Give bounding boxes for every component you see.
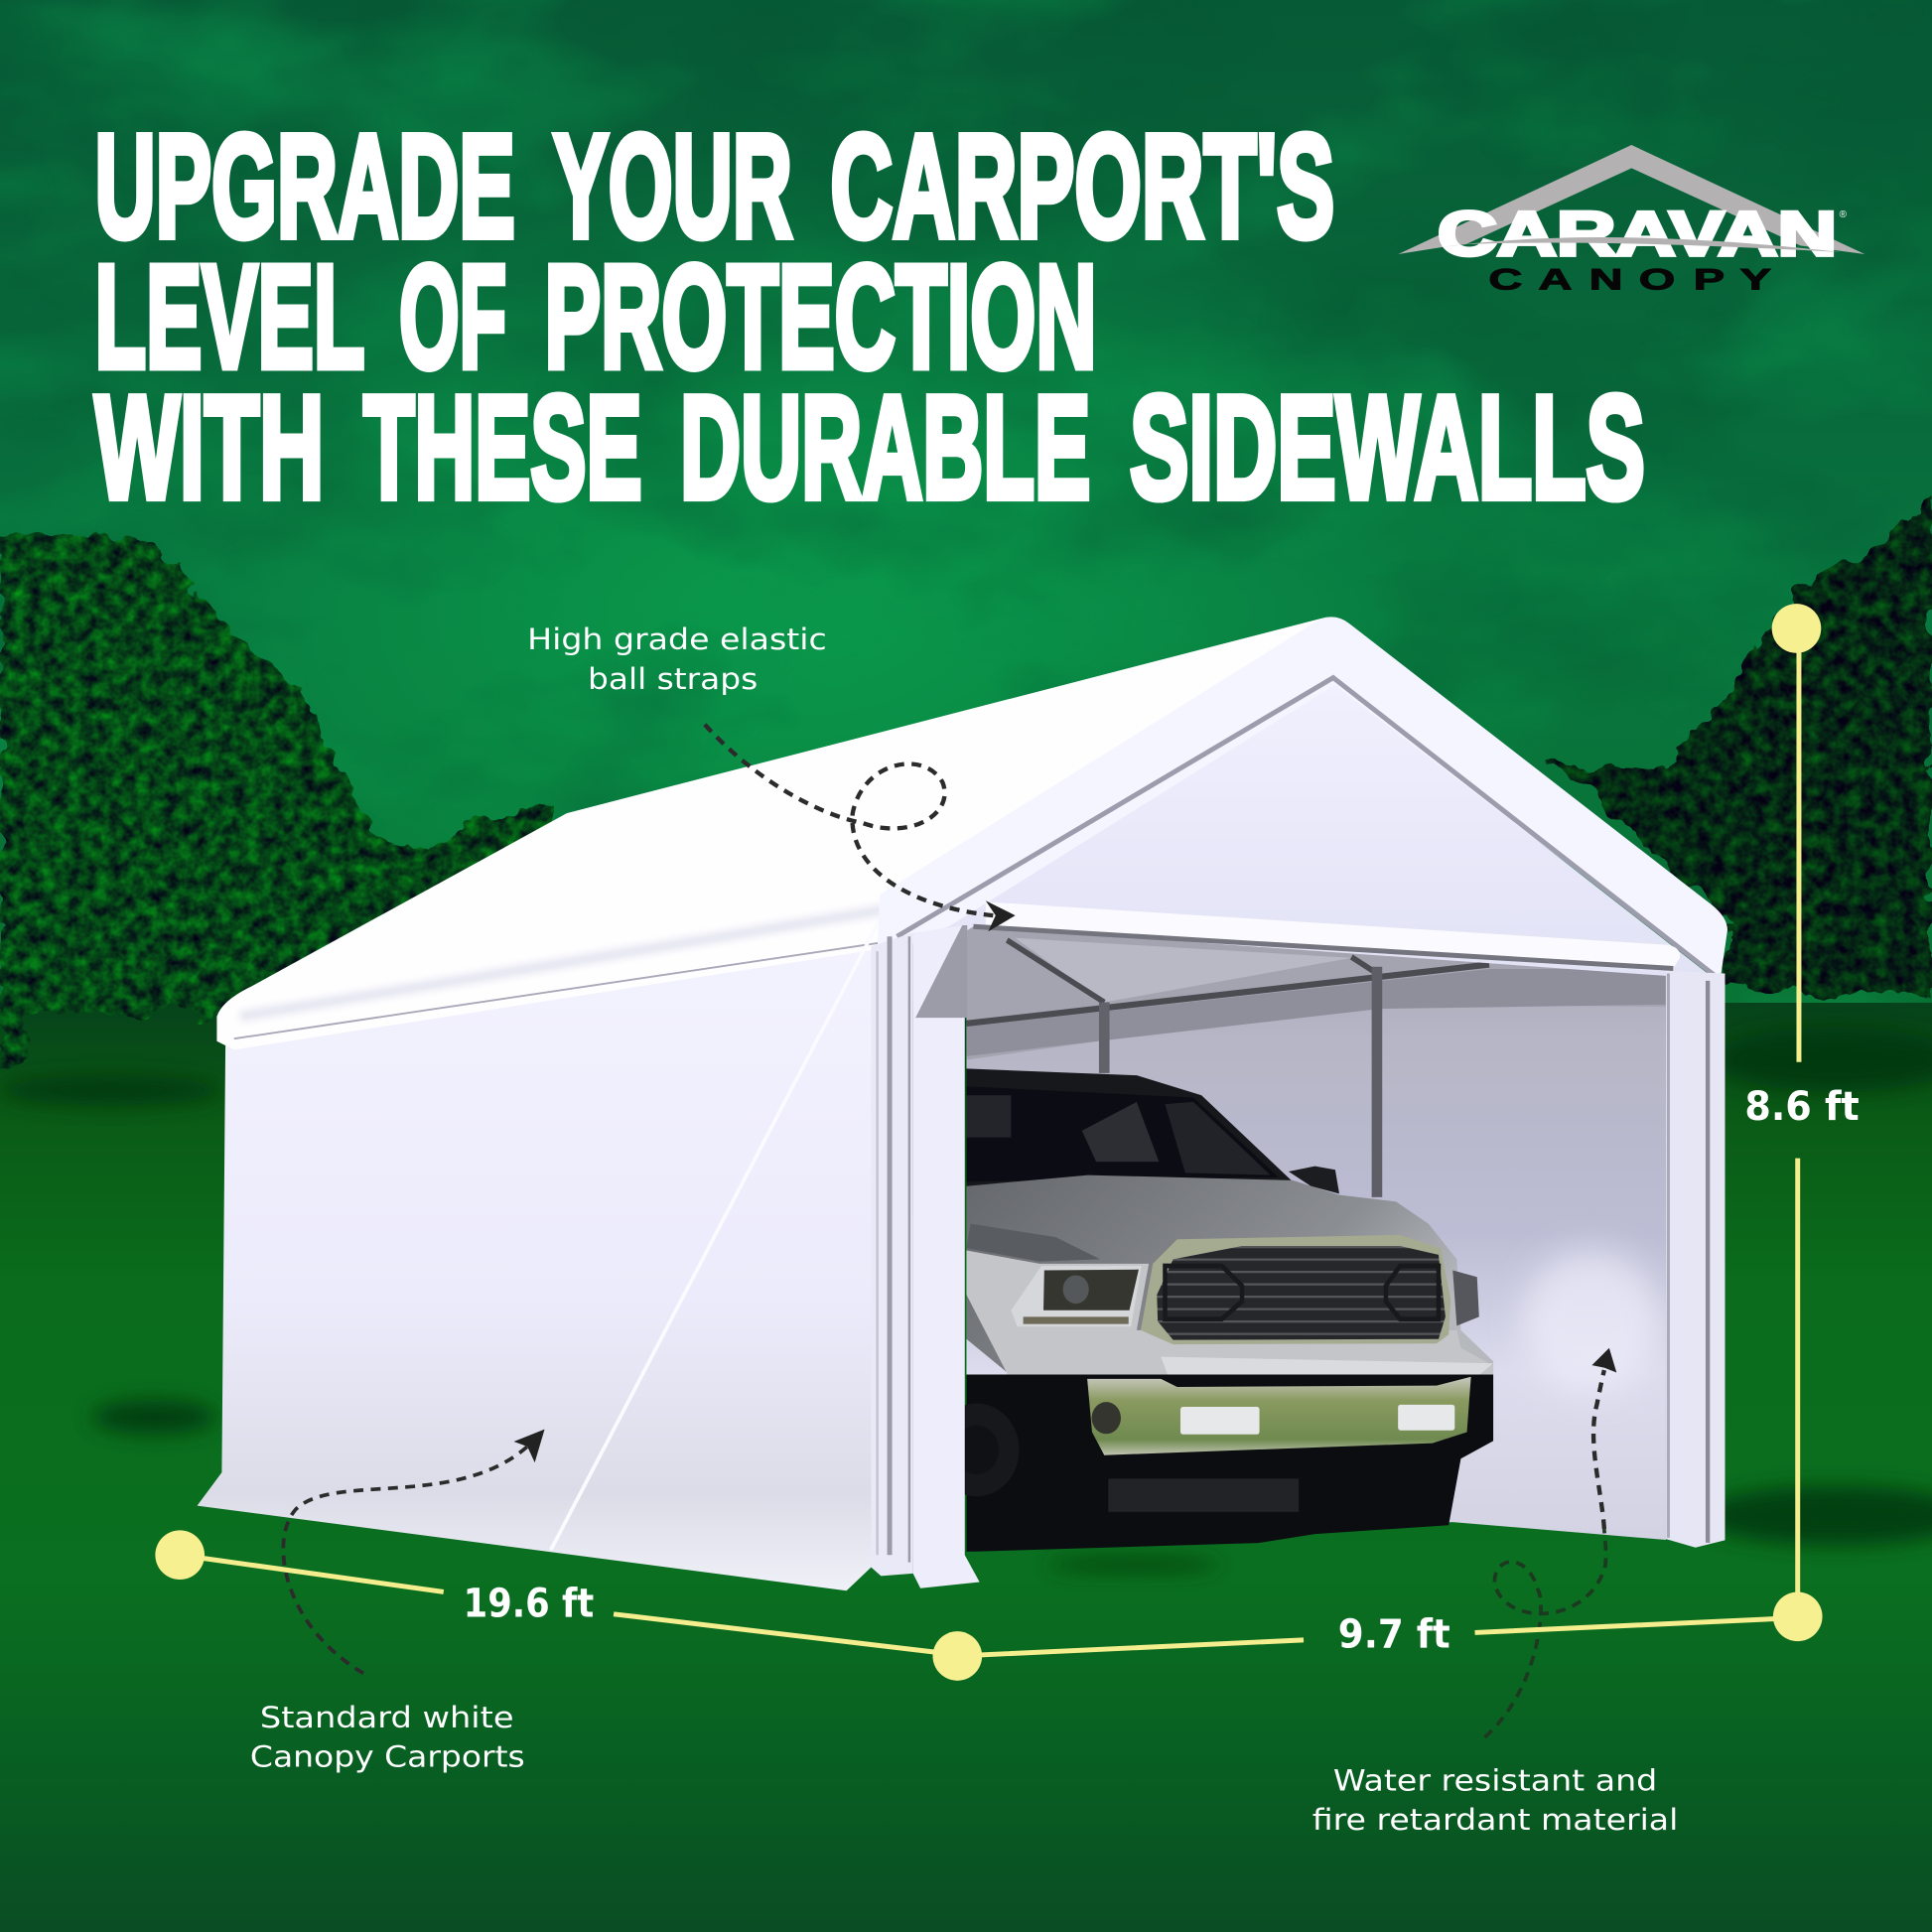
grass shadows (0, 1028, 1932, 1571)
truck body (966, 1175, 1493, 1383)
title: DURABLE (680, 365, 1090, 529)
title (95, 104, 1645, 529)
dimension: height 8.6 ft (1744, 604, 1860, 1641)
tent left posts (871, 925, 980, 1588)
tent side wall (198, 942, 888, 1590)
interior wall (966, 913, 1666, 1552)
truck and carport interior (934, 913, 1666, 1552)
callout: water resistant material: fire retardant material (1312, 1803, 1678, 1838)
logo: Caravan Canopy (1398, 145, 1864, 296)
callout: elastic ball straps: High grade elastic (527, 622, 827, 657)
interior glow on right wall (1522, 1250, 1659, 1392)
dimension: width 9.7 ft (932, 1611, 1798, 1681)
callout: standard white canopy (250, 1430, 545, 1775)
callout: standard white canopy: Canopy Carports (250, 1740, 525, 1775)
headlight (1011, 1266, 1479, 1326)
callout: standard white canopy: Standard white (260, 1701, 514, 1735)
roof fascia (878, 617, 1727, 981)
logo: Caravan Canopy: CARAVAN (1438, 200, 1837, 269)
callout: water resistant material (1312, 1348, 1678, 1838)
logo: Caravan Canopy: ® (1840, 209, 1848, 220)
callout: water resistant material: Water resistant and (1333, 1763, 1657, 1798)
beam (973, 901, 1680, 968)
grille (1141, 1235, 1450, 1344)
callout: elastic ball straps (527, 622, 1016, 931)
dimension: length 19.6 ft: 19.6 ft (464, 1581, 594, 1626)
lower bumper and shadow (934, 1374, 1493, 1552)
title: PROTECTION (545, 235, 1097, 399)
sky background (0, 0, 1932, 1092)
truck cab (966, 1068, 1339, 1193)
callout: elastic ball straps: ball straps (588, 662, 758, 697)
dimension: width 9.7 ft: 9.7 ft (1338, 1611, 1450, 1657)
tent side roof (216, 619, 1343, 1049)
title: YOUR (553, 104, 792, 268)
interior ceiling and shadow band (966, 913, 1666, 1060)
chrome bumper (1087, 1377, 1471, 1455)
title: CARPORT'S (830, 104, 1334, 268)
tent front gable (905, 681, 1721, 983)
title: UPGRADE (95, 104, 515, 268)
logo: Caravan Canopy: CANOPY (1488, 264, 1771, 296)
title: WITH (95, 365, 324, 529)
tent right posts (1666, 971, 1725, 1548)
frame bars (966, 940, 1489, 1197)
dimension: length 19.6 ft (155, 1530, 957, 1655)
tree line left (0, 535, 559, 1066)
dimension: height 8.6 ft: 8.6 ft (1744, 1084, 1860, 1130)
title: LEVEL (95, 235, 364, 399)
wall seam (551, 905, 888, 1550)
title: THESE (363, 365, 642, 529)
lawn ground (0, 1003, 1932, 1932)
tree line right (1540, 492, 1932, 998)
title: OF (399, 235, 506, 399)
